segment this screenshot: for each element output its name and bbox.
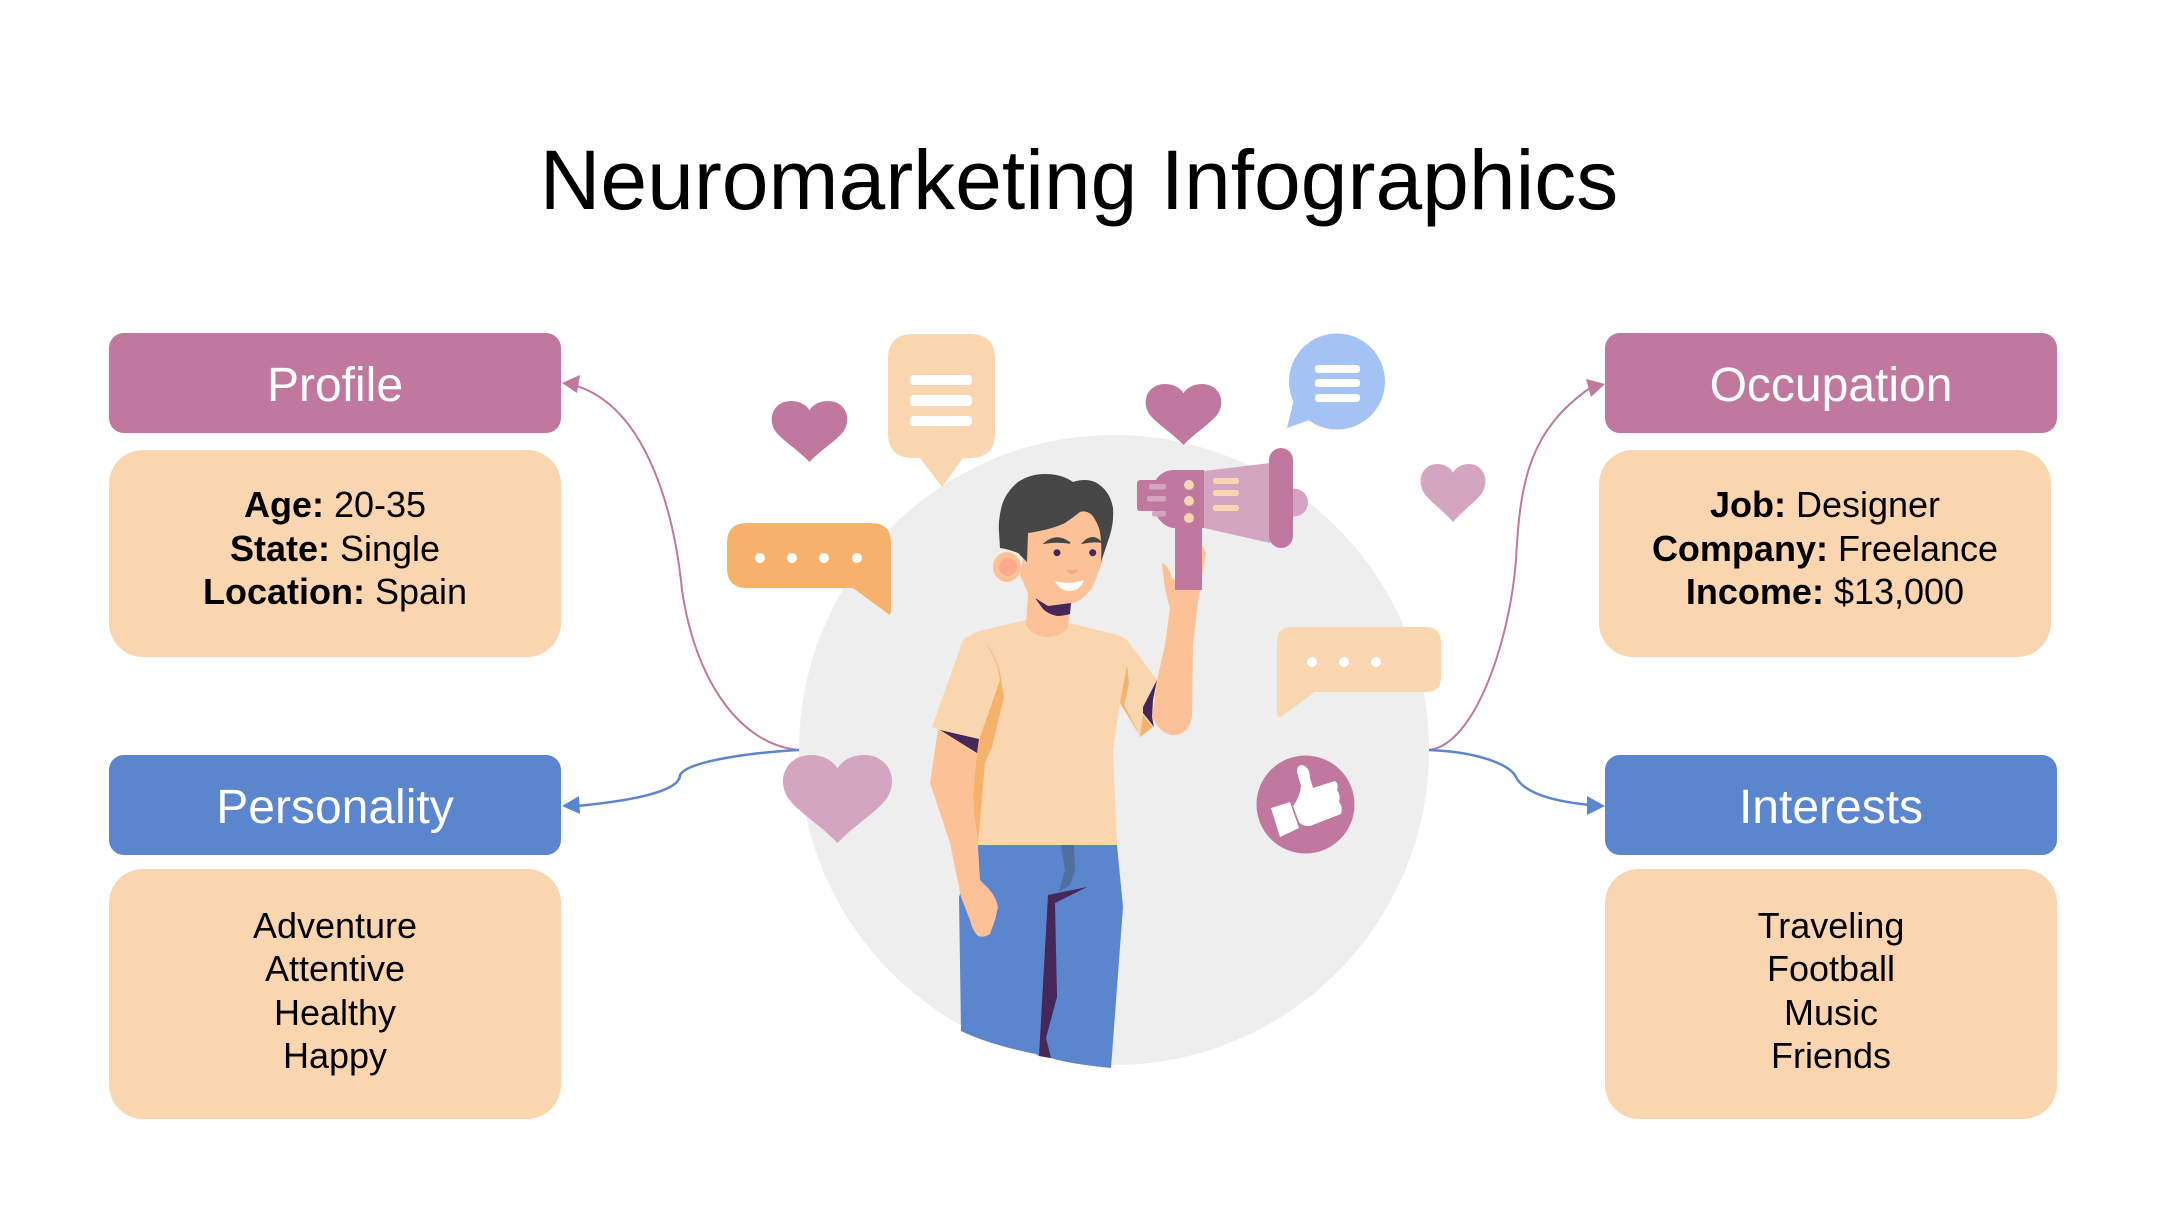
nose: [1067, 570, 1078, 574]
panel: Interests list: [1605, 869, 2057, 1119]
speech bubble: peach dots: [1277, 627, 1441, 717]
panel heading: Occupation: [1605, 333, 2057, 433]
panel: Interests list: Friends: [1771, 1035, 1891, 1076]
panel: Personality traits: Adventure: [253, 904, 417, 946]
panel: Occupation details: Income: $13,000: [1686, 571, 1964, 612]
hair: [999, 474, 1113, 562]
jeans: [959, 845, 1123, 1068]
right sleeve shadow: [1120, 665, 1153, 737]
icon: thumbs up badge: [1256, 756, 1354, 854]
icon: heart left: [772, 401, 847, 462]
arrow: to Interests: [1429, 750, 1605, 815]
inner sleeve dark: [1143, 680, 1157, 727]
panel: Occupation details: Company: Freelance: [1652, 528, 1998, 568]
person: [930, 448, 1308, 1068]
shirt shadow left: [972, 643, 1004, 843]
jeans fly: [1059, 845, 1075, 892]
panel: Profile details: State: Single: [230, 528, 440, 568]
neck: [1026, 593, 1071, 637]
eyebrows: [1045, 538, 1101, 543]
arrow: to Personality: [562, 750, 799, 814]
megaphone handle: [1175, 515, 1202, 590]
eyes: [1054, 549, 1096, 556]
megaphone body: [1150, 470, 1204, 528]
panel: Interests list: Traveling: [1758, 904, 1904, 946]
panel heading: Interests: Interests: [1739, 781, 1923, 834]
jeans seam: [1039, 887, 1087, 1058]
mouth: [1055, 580, 1084, 591]
panel heading: Personality: [109, 755, 561, 855]
speech bubble: blue round: [1287, 334, 1385, 430]
collar shadow: [1035, 598, 1071, 616]
panel: Profile details: Location: Spain: [203, 571, 467, 612]
panel heading: Occupation: Occupation: [1710, 359, 1952, 412]
shirt body: [932, 620, 1157, 845]
panel: Profile details: [109, 450, 561, 657]
panel: Personality traits: Happy: [283, 1035, 387, 1076]
panel: Personality traits: Attentive: [265, 948, 405, 989]
megaphone cone: [1204, 463, 1270, 543]
megaphone back: [1137, 480, 1161, 511]
megaphone bell rim: [1269, 448, 1293, 548]
icon: heart top: [1146, 384, 1221, 445]
panel heading: Profile: Profile: [267, 359, 403, 412]
left sleeve band: [940, 730, 979, 753]
panel heading: Interests: [1605, 755, 2057, 855]
megaphone details: [1147, 478, 1239, 523]
panel: Occupation details: [1599, 450, 2051, 657]
panel heading: Profile: [109, 333, 561, 433]
ear: [993, 552, 1021, 582]
left arm: [930, 729, 998, 937]
title: Neuromarketing Infographics: [540, 133, 1618, 227]
face: [1020, 505, 1104, 603]
inner ear: [999, 558, 1017, 576]
icon: heart right light: [1421, 464, 1485, 522]
speech bubble: tall peach: [888, 334, 995, 487]
speech bubble: orange dots: [727, 523, 891, 615]
icon: heart large light: [783, 755, 892, 843]
panel: Occupation details: Job: Designer: [1710, 484, 1940, 525]
panel: Interests list: Music: [1784, 992, 1878, 1032]
panel heading: Personality: Personality: [216, 781, 454, 834]
panel: Profile details: Age: 20-35: [244, 484, 426, 525]
panel: Personality traits: [109, 869, 561, 1119]
arrow: to Occupation: [1429, 379, 1605, 750]
arrow: to Profile: [562, 375, 799, 750]
panel: Personality traits: Healthy: [274, 992, 396, 1032]
background circle: [799, 435, 1429, 1065]
right arm and hand: [1152, 545, 1206, 735]
megaphone back light: [1280, 488, 1308, 516]
panel: Interests list: Football: [1767, 948, 1895, 989]
